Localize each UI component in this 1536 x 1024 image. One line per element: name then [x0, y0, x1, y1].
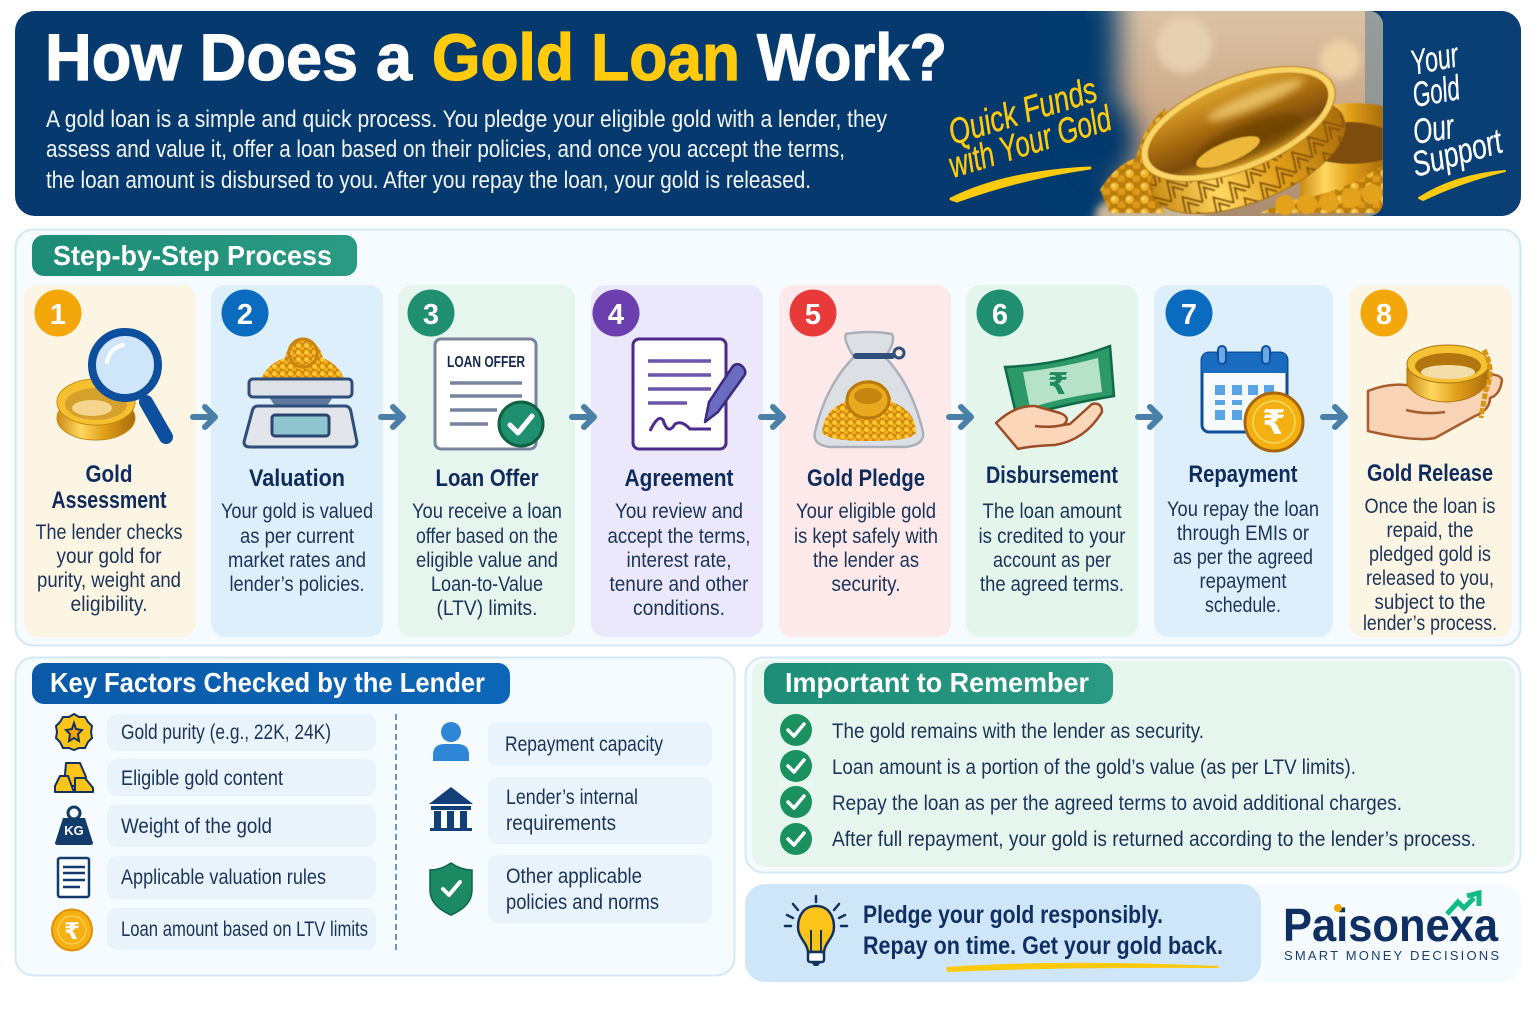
icon: rules document [58, 858, 89, 897]
checklist text: After full repayment, your gold is returned according to the lender’s process. [832, 828, 1476, 851]
icon: rupee coin: ₹ [64, 919, 80, 945]
step 5 card: the lender as [813, 549, 919, 572]
step 7 card: schedule. [1205, 594, 1281, 617]
icon: loan offer document: LOAN OFFER [447, 354, 525, 371]
icon: calendar with rupee coin: ₹ [1262, 403, 1286, 443]
step 1 card: purity, weight and [37, 569, 181, 592]
step 7 card: You repay the loan [1167, 498, 1319, 521]
checklist text [832, 720, 1476, 851]
title [45, 20, 947, 94]
heading: important to remember [764, 663, 1113, 704]
step 5 card: Your eligible gold [796, 500, 936, 523]
icon: person [433, 722, 469, 761]
step 6 card: account as per [993, 549, 1111, 572]
panel: important to remember [746, 658, 1520, 872]
icon: light bulb [785, 896, 847, 966]
callout text: Repay on time. Get your gold back. [863, 932, 1223, 960]
heading: important to remember: Important to Remember [785, 667, 1089, 698]
step 8 card: subject to the [1374, 591, 1486, 614]
step 2 card: market rates and [228, 549, 366, 572]
step 1 card: Assessment [52, 487, 166, 514]
step 5 card: Gold Pledge [807, 465, 925, 492]
tagline: quick funds: Quick Funds [943, 69, 1102, 153]
icon: hand holding banknote [996, 346, 1114, 449]
main ring [1150, 105, 1346, 215]
icon: kg weight [55, 807, 93, 845]
step 1 card: The lender checks [36, 521, 182, 544]
factor list right [488, 722, 712, 923]
step 2 card [211, 285, 383, 637]
heading: key factors: Key Factors Checked by the Lender [50, 667, 485, 698]
step 4 card: Agreement [624, 465, 734, 492]
intro paragraph: A gold loan is a simple and quick process. You pledge your eligible gold with a lender, they [46, 106, 887, 133]
step 1 card: eligibility. [70, 593, 148, 616]
heading: step-by-step process [32, 235, 357, 276]
step 8 card: released to you, [1366, 567, 1494, 590]
tagline: quick funds [943, 69, 1117, 201]
title: How Does a [45, 20, 413, 94]
step 3 card [398, 285, 575, 637]
factor list left: Loan amount based on LTV limits [121, 918, 368, 941]
step 3 card: You receive a loan [412, 500, 562, 523]
step 5 card: 5 [805, 299, 821, 331]
step 8 card: Once the loan is [1364, 495, 1496, 518]
step 7 card: 7 [1181, 299, 1197, 331]
panel: step-by-step process [16, 230, 1520, 646]
step 1 card: Gold [86, 461, 132, 488]
checklist icons [780, 714, 812, 855]
step 6 card: 6 [992, 299, 1008, 331]
flow arrows between steps [193, 407, 1345, 427]
right band [1383, 11, 1521, 216]
factor list left: Weight of the gold [121, 815, 272, 838]
callout text: Pledge your gold responsibly. [863, 901, 1163, 929]
step 3 card: Loan-to-Value [431, 573, 543, 596]
factor list right: Other applicable [506, 865, 642, 888]
factor list right: Repayment capacity [505, 733, 663, 756]
icon: shield [430, 863, 472, 915]
step 2 card: Your gold is valued [221, 500, 373, 523]
step 4 card [591, 285, 763, 637]
icon: kg weight: KG [64, 823, 84, 838]
icon: loan offer document [435, 339, 543, 449]
step 8 card: lender’s process. [1363, 612, 1497, 635]
step 7 card: through EMIs or [1177, 522, 1309, 545]
step 4 card: interest rate, [626, 549, 732, 572]
step 1 card: your gold for [56, 545, 162, 568]
heading: step-by-step process: Step-by-Step Process [53, 240, 332, 271]
step 3 card: (LTV) limits. [436, 597, 538, 620]
checklist text: Repay the loan as per the agreed terms to avoid additional charges. [832, 792, 1402, 815]
factor list right: policies and norms [506, 891, 659, 914]
logo wordmark: Paisonexa [1283, 899, 1498, 951]
step 4 card: accept the terms, [608, 525, 750, 548]
icon: purity badge [56, 714, 92, 750]
factor list right: requirements [506, 812, 616, 835]
step 5 card: is kept safely with [794, 525, 938, 548]
title: Work? [757, 20, 947, 94]
step 4 card: 4 [608, 299, 624, 331]
step 8 card: 8 [1376, 299, 1392, 331]
icon: weighing scale with gold [244, 339, 357, 447]
factor list left [107, 714, 376, 950]
step 8 card: Gold Release [1367, 460, 1493, 487]
tagline: your gold our support: Gold [1410, 68, 1464, 115]
tagline: your gold our support [1407, 35, 1508, 200]
step 1 card: 1 [50, 299, 66, 331]
icon: ring and magnifier [57, 332, 166, 440]
step 4 card: tenure and other [610, 573, 748, 596]
icon: hand holding banknote: ₹ [1048, 367, 1068, 402]
step 3 card: offer based on the [416, 525, 558, 548]
tagline: your gold our support: Support [1407, 122, 1508, 185]
checklist text: The gold remains with the lender as security. [832, 720, 1204, 743]
icon: rupee coin [52, 910, 92, 950]
tagline: quick funds: with Your Gold [943, 97, 1117, 186]
header banner [15, 11, 1521, 216]
step 4 card: You review and [615, 500, 743, 523]
factor list left: Eligible gold content [121, 767, 283, 790]
checklist text: Loan amount is a portion of the gold’s value (as per LTV limits). [832, 756, 1356, 779]
step 8 card [1349, 285, 1512, 637]
step 6 card: is credited to your [978, 525, 1126, 548]
tagline: your gold our support: Our [1410, 107, 1458, 152]
step 6 card: The loan amount [982, 500, 1122, 523]
step 4 card: conditions. [633, 597, 725, 620]
intro paragraph: the loan amount is disbursed to you. After you repay the loan, your gold is released. [46, 167, 811, 194]
icon: bank [429, 787, 473, 831]
step 3 card: Loan Offer [436, 465, 538, 492]
step 3 card: 3 [423, 299, 439, 331]
intro paragraph: assess and value it, offer a loan based on their policies, and once you accept the terms, [46, 136, 845, 163]
step 2 card: as per current [240, 525, 354, 548]
callout text [863, 901, 1223, 960]
icon: gold bars [55, 763, 93, 792]
logo slogan: SMART MONEY DECISIONS [1284, 948, 1499, 963]
step 7 card: as per the agreed [1173, 546, 1313, 569]
logo panel [1230, 884, 1521, 982]
step 7 card: Repayment [1188, 461, 1298, 488]
icon: signed agreement and pen [633, 339, 745, 449]
icon: hand receiving gold ring [1368, 345, 1502, 439]
step 2 card: lender’s policies. [230, 573, 364, 596]
step 3 card: eligible value and [416, 549, 558, 572]
intro paragraph [46, 106, 887, 194]
step 5 card [779, 285, 951, 637]
step 2 card: Valuation [249, 465, 345, 492]
title: Gold Loan [432, 20, 740, 94]
step 1 card [24, 285, 196, 637]
factor list left: Gold purity (e.g., 22K, 24K) [121, 721, 331, 744]
panel: key factors [16, 658, 734, 976]
factor list left: Applicable valuation rules [121, 866, 326, 889]
step 6 card: Disbursement [986, 462, 1118, 489]
tagline: your gold our support: Your [1407, 35, 1463, 83]
step 8 card: repaid, the [1386, 519, 1474, 542]
step 7 card: repayment [1200, 570, 1287, 593]
step 6 card: the agreed terms. [980, 573, 1124, 596]
step 2 card: 2 [237, 299, 253, 331]
logo growth arrow [1447, 893, 1479, 914]
step 7 card [1154, 285, 1333, 637]
factor list right: Lender’s internal [506, 786, 638, 809]
gold jewellery photo [1087, 11, 1383, 216]
icon: bag of gold [815, 332, 923, 447]
step 8 card: pledged gold is [1369, 543, 1491, 566]
step 5 card: security. [832, 573, 900, 596]
icon: calendar with rupee coin [1202, 346, 1303, 451]
callout: pledge responsibly [745, 884, 1261, 982]
step 6 card [966, 285, 1138, 637]
